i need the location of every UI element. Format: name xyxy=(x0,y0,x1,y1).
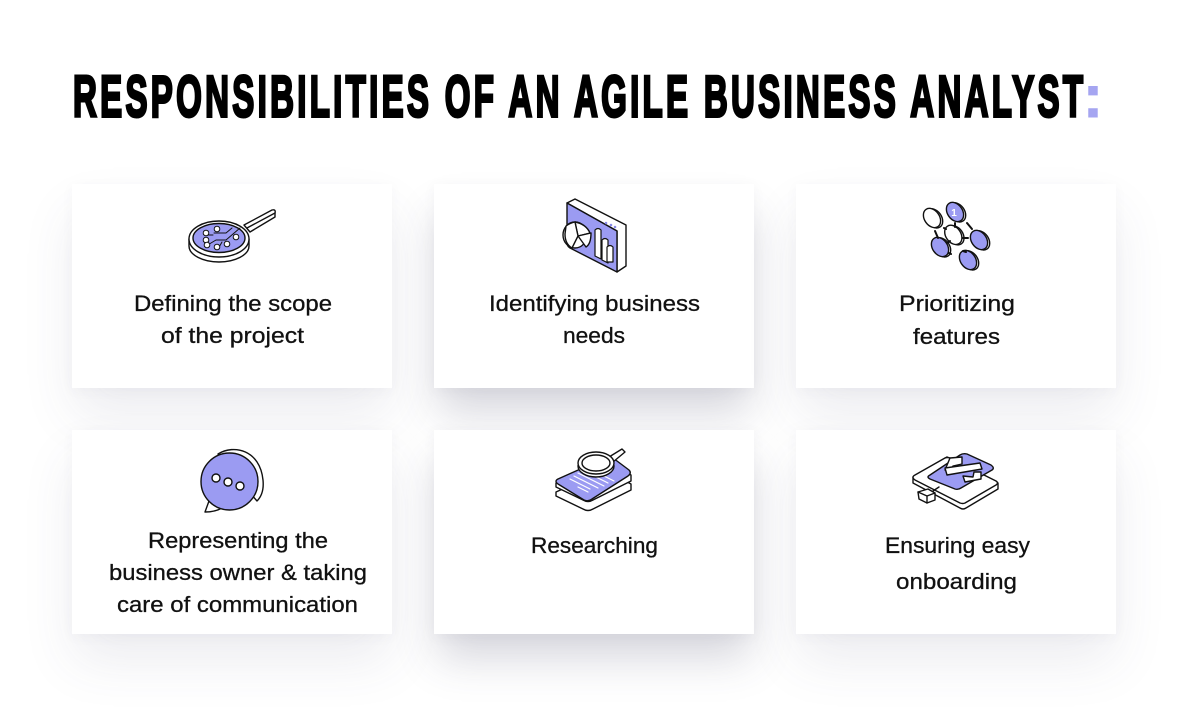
text: representing the business owner: Representing the xyxy=(148,528,328,553)
icon: priority nodes: 1 xyxy=(951,208,957,219)
text: representing the business owner: care of communication xyxy=(117,592,358,617)
text: ensuring easy onboarding: Ensuring easy xyxy=(885,533,1031,558)
text: ensuring easy onboarding xyxy=(885,533,1031,594)
icon: dashboard with charts xyxy=(563,199,626,272)
panel: ensuring easy onboarding xyxy=(796,430,1116,634)
panel: representing the business owner xyxy=(72,430,392,634)
text: researching: Researching xyxy=(531,533,658,558)
icon: documents with magnifier xyxy=(556,449,631,510)
text: identifying business needs: Identifying business xyxy=(489,291,700,316)
title: : xyxy=(1083,63,1103,130)
text: identifying business needs: needs xyxy=(563,323,625,348)
icon: speech bubble xyxy=(201,450,263,512)
text: prioritizing features: features xyxy=(913,324,1000,349)
panel: researching xyxy=(434,430,754,634)
text: ensuring easy onboarding: onboarding xyxy=(896,569,1017,594)
title: RESPONSIBILITIES OF AN AGILE BUSINESS ANALYST xyxy=(73,65,1083,130)
text: prioritizing features: Prioritizing xyxy=(899,291,1015,316)
text: defining the scope xyxy=(134,291,332,348)
text: representing the business owner xyxy=(109,528,367,617)
panel: identifying business needs xyxy=(434,184,754,388)
text: defining the scope: of the project xyxy=(161,323,305,348)
icon: magnifier with circuit xyxy=(189,210,275,262)
text: representing the business owner: business owner & taking xyxy=(109,560,367,585)
icon: priority nodes xyxy=(920,198,993,274)
panel: defining the scope xyxy=(72,184,392,388)
text: defining the scope: Defining the scope xyxy=(134,291,332,316)
text: prioritizing features xyxy=(899,291,1015,349)
text: identifying business needs xyxy=(489,291,700,348)
icon: onboarding arrows on board xyxy=(913,454,998,509)
panel: prioritizing features xyxy=(796,184,1116,388)
